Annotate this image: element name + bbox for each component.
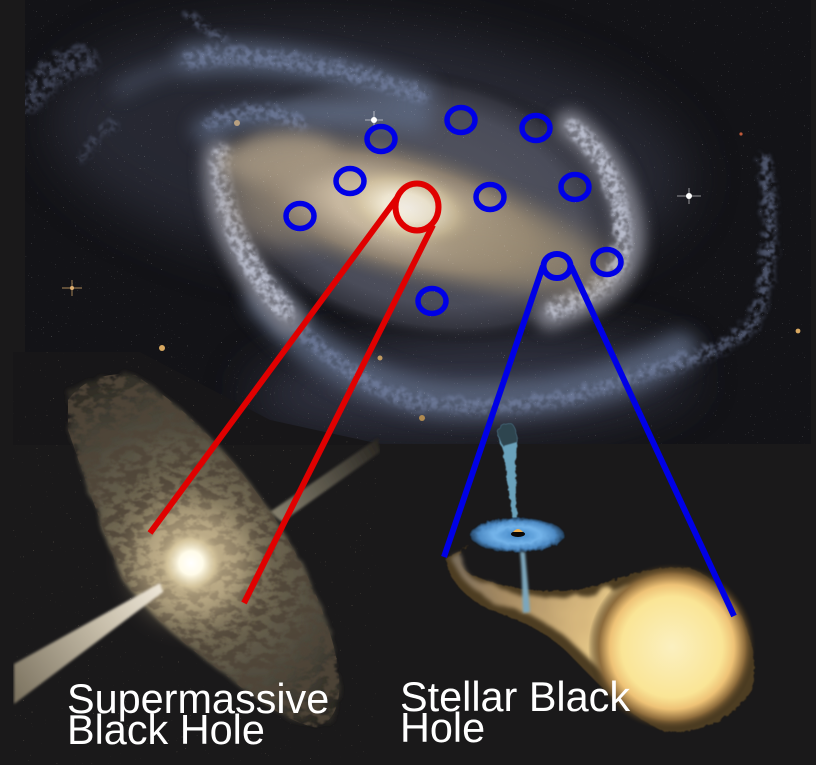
- companion star: [588, 563, 756, 731]
- indicator: small blue rings marking stellar black holes: [286, 108, 621, 314]
- black hole: [511, 531, 525, 537]
- central bar: [216, 134, 558, 290]
- accretion disc: [470, 518, 564, 552]
- faint outer glow: [45, 10, 695, 256]
- inner ring fill: [216, 172, 315, 260]
- soft arm glow: [120, 55, 680, 400]
- hole glow: [513, 529, 523, 532]
- gas stream body: [454, 553, 690, 712]
- gas stream outer edge: [446, 546, 754, 732]
- star field: [25, 0, 811, 444]
- jet plume top: [498, 424, 517, 446]
- tan specks: [13, 352, 380, 765]
- jet: lower left: [14, 583, 163, 704]
- label: stellar black hole: Hole: [400, 705, 485, 751]
- callout: blue zoom lines to stellar black hole: [444, 254, 734, 616]
- bright ring clouds: [222, 130, 624, 310]
- label: supermassive black hole: Black Hole: [67, 707, 265, 753]
- panel: stellar black hole illustration: [446, 424, 756, 732]
- galaxy disc: [68, 374, 339, 728]
- bright stars: [62, 111, 800, 421]
- label: supermassive black hole: Supermassive: [67, 676, 329, 722]
- lower jet: [520, 552, 530, 613]
- galaxy core: [365, 174, 464, 240]
- label: stellar black hole: [400, 674, 630, 751]
- arm star clouds: [30, 15, 770, 407]
- panel: barred spiral galaxy photograph: [25, 0, 811, 446]
- spiral arms: [30, 15, 770, 407]
- label: stellar black hole: Stellar Black: [400, 674, 630, 720]
- inner disc halo: [256, 84, 612, 332]
- label: supermassive black hole: [67, 676, 329, 753]
- callout: red zoom lines to supermassive black hole: [150, 184, 438, 603]
- nucleus: [162, 534, 220, 593]
- disc glow: [134, 504, 250, 620]
- upper jet: [498, 424, 519, 532]
- bright ring glow: [218, 125, 630, 320]
- disc dust lanes: [68, 374, 339, 728]
- jet: upper right: [270, 438, 380, 522]
- panel: supermassive black hole illustration: [13, 352, 380, 765]
